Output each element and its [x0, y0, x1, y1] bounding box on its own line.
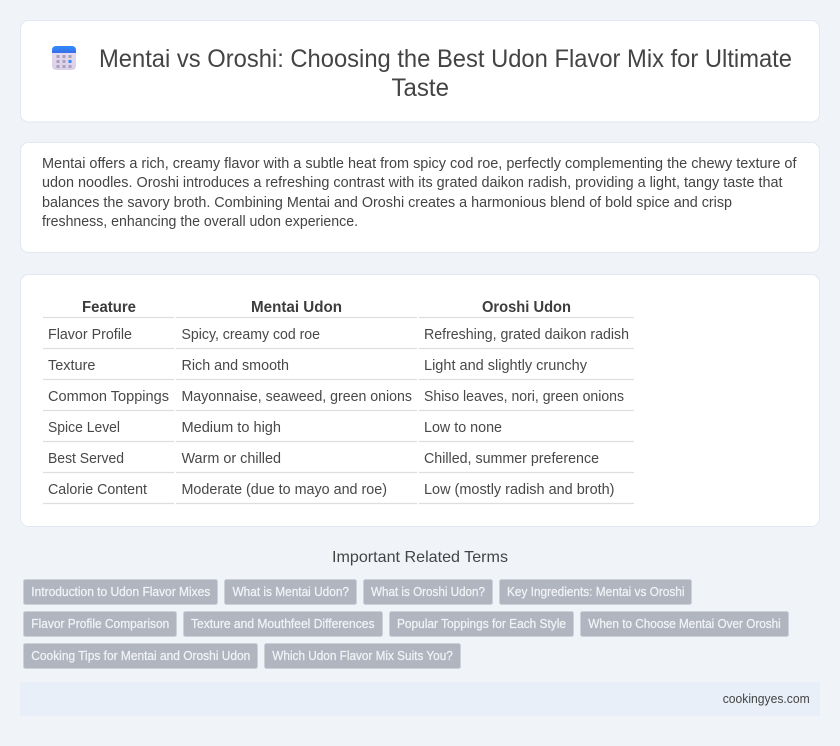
- row: best served: Best Served: [48, 451, 124, 467]
- tag: Which Udon Flavor Mix Suits You?: [272, 649, 453, 663]
- row: flavor profile: Flavor Profile: [48, 327, 132, 343]
- footer band: [20, 682, 820, 716]
- table header: Oroshi Udon: [482, 299, 571, 316]
- panel: intro paragraph: [20, 142, 820, 252]
- table header: Mentai Udon: [251, 299, 342, 316]
- tag: Popular Toppings for Each Style: [397, 617, 566, 631]
- row: texture: [48, 358, 588, 374]
- table header: Feature: [82, 299, 136, 316]
- row: calorie content: Moderate (due to mayo and roe): [182, 482, 387, 498]
- title panel: [20, 20, 820, 122]
- panel: intro paragraph: balances the savory broth. Combining Mentai and Oroshi creates a harmonious blend of bold spice and crisp: [42, 195, 732, 211]
- tag: [224, 580, 356, 604]
- heading: related terms: Important Related Terms: [332, 549, 508, 566]
- tag: [24, 612, 176, 636]
- row: best served: [48, 451, 599, 467]
- tag: [24, 644, 258, 668]
- tag: Flavor Profile Comparison: [31, 617, 169, 631]
- tag: [580, 612, 788, 636]
- row: spice level: Low to none: [424, 420, 502, 436]
- panel: intro paragraph: Mentai offers a rich, creamy flavor with a subtle heat from spicy cod roe, perfectly complementing the chewy texture of: [42, 156, 798, 172]
- row: flavor profile: Spicy, creamy cod roe: [182, 327, 320, 343]
- tag: What is Mentai Udon?: [232, 585, 349, 599]
- tag: [390, 612, 574, 636]
- row: texture: Texture: [48, 358, 96, 374]
- footer band: cookingyes.com: [723, 692, 810, 706]
- title text: Taste: [392, 74, 449, 102]
- row: calorie content: Low (mostly radish and broth): [424, 482, 614, 498]
- row: spice level: Spice Level: [48, 420, 120, 436]
- row: common toppings: Common Toppings: [48, 389, 169, 405]
- tag: [500, 580, 692, 604]
- tag: What is Oroshi Udon?: [371, 585, 485, 599]
- title text: Mentai vs Oroshi: Choosing the Best Udon Flavor Mix for Ultimate: [99, 45, 792, 73]
- panel: intro paragraph: udon noodles. Oroshi introduces a refreshing contrast with its grated daikon radish, providing a light, tangy taste that: [42, 175, 782, 191]
- tags: related terms: [24, 580, 788, 668]
- row: calorie content: [48, 482, 614, 498]
- tag: [184, 612, 382, 636]
- table header: [82, 299, 571, 316]
- row: flavor profile: Refreshing, grated daikon radish: [424, 327, 629, 343]
- row: texture: Light and slightly crunchy: [424, 358, 588, 374]
- row: calorie content: Calorie Content: [48, 482, 147, 498]
- tag: [364, 580, 492, 604]
- row: best served: Warm or chilled: [182, 451, 281, 467]
- tag: [264, 644, 460, 668]
- row: common toppings: [48, 389, 624, 405]
- panel: comparison table: [20, 274, 820, 526]
- tag: Key Ingredients: Mentai vs Oroshi: [507, 585, 684, 599]
- row: texture: Rich and smooth: [182, 358, 289, 374]
- tag: Introduction to Udon Flavor Mixes: [31, 585, 210, 599]
- tag: Texture and Mouthfeel Differences: [191, 617, 374, 631]
- icon: calendar: [52, 46, 76, 70]
- row: flavor profile: [48, 327, 629, 343]
- panel: intro paragraph: freshness, enhancing the overall udon experience.: [42, 214, 358, 230]
- row: best served: Chilled, summer preference: [424, 451, 599, 467]
- row: spice level: [48, 420, 502, 436]
- row: common toppings: Shiso leaves, nori, green onions: [424, 389, 624, 405]
- tag: [24, 580, 218, 604]
- row: common toppings: Mayonnaise, seaweed, green onions: [182, 389, 412, 405]
- tag: Cooking Tips for Mentai and Oroshi Udon: [31, 649, 250, 663]
- tag: When to Choose Mentai Over Oroshi: [588, 617, 781, 631]
- title text: [99, 45, 792, 102]
- row: spice level: Medium to high: [182, 420, 281, 436]
